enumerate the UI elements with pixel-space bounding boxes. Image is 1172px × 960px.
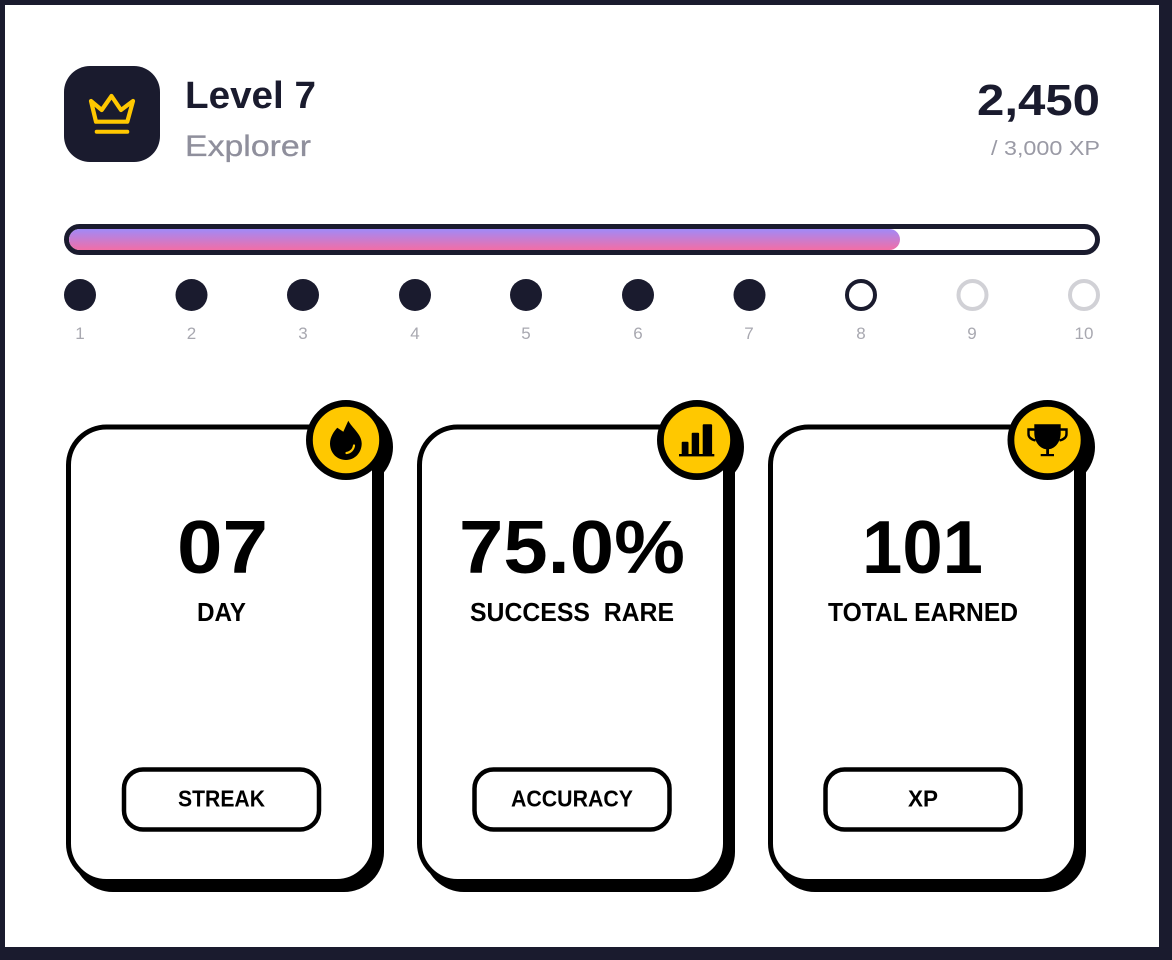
xp value: 101 [862,505,983,589]
level steps: 2 [187,324,196,343]
accuracy value: 75.0% [459,505,685,589]
accuracy label: SUCCESS RARE [470,597,674,627]
accuracy tag: ACCURACY [511,786,633,812]
streak tag [124,770,319,830]
level steps: 3 [298,324,308,343]
streak label: DAY [197,597,246,627]
icon: crown [64,66,160,162]
xp value: 2,450 [977,76,1100,125]
level title: Level 7 [185,75,316,117]
level subtitle: Explorer [185,130,311,163]
header: xp [977,76,1100,160]
xp tag [826,770,1020,830]
icon: flame badge [309,403,383,477]
accuracy tag [474,770,670,830]
xp target: / 3,000 XP [991,138,1100,160]
icon: trophy badge [1011,403,1084,477]
level steps: 4 [410,324,420,343]
streak value: 07 [177,505,268,589]
level steps [64,279,1098,343]
level steps: 6 [633,324,643,343]
streak tag: STREAK [178,786,265,812]
header: level [64,66,316,163]
level steps: 1 [75,324,85,343]
level steps: 8 [856,324,866,343]
panel: xp [770,403,1095,892]
level steps: 9 [967,324,977,343]
xp label: TOTAL EARNED [828,597,1018,627]
progress bar [66,226,1098,252]
level steps: 10 [1075,324,1093,343]
level steps: 5 [521,324,531,343]
icon: bar chart badge [660,403,734,477]
panel: accuracy [420,403,744,892]
xp tag: XP [908,786,938,812]
panel: streak [68,403,393,892]
level steps: 7 [744,324,754,343]
